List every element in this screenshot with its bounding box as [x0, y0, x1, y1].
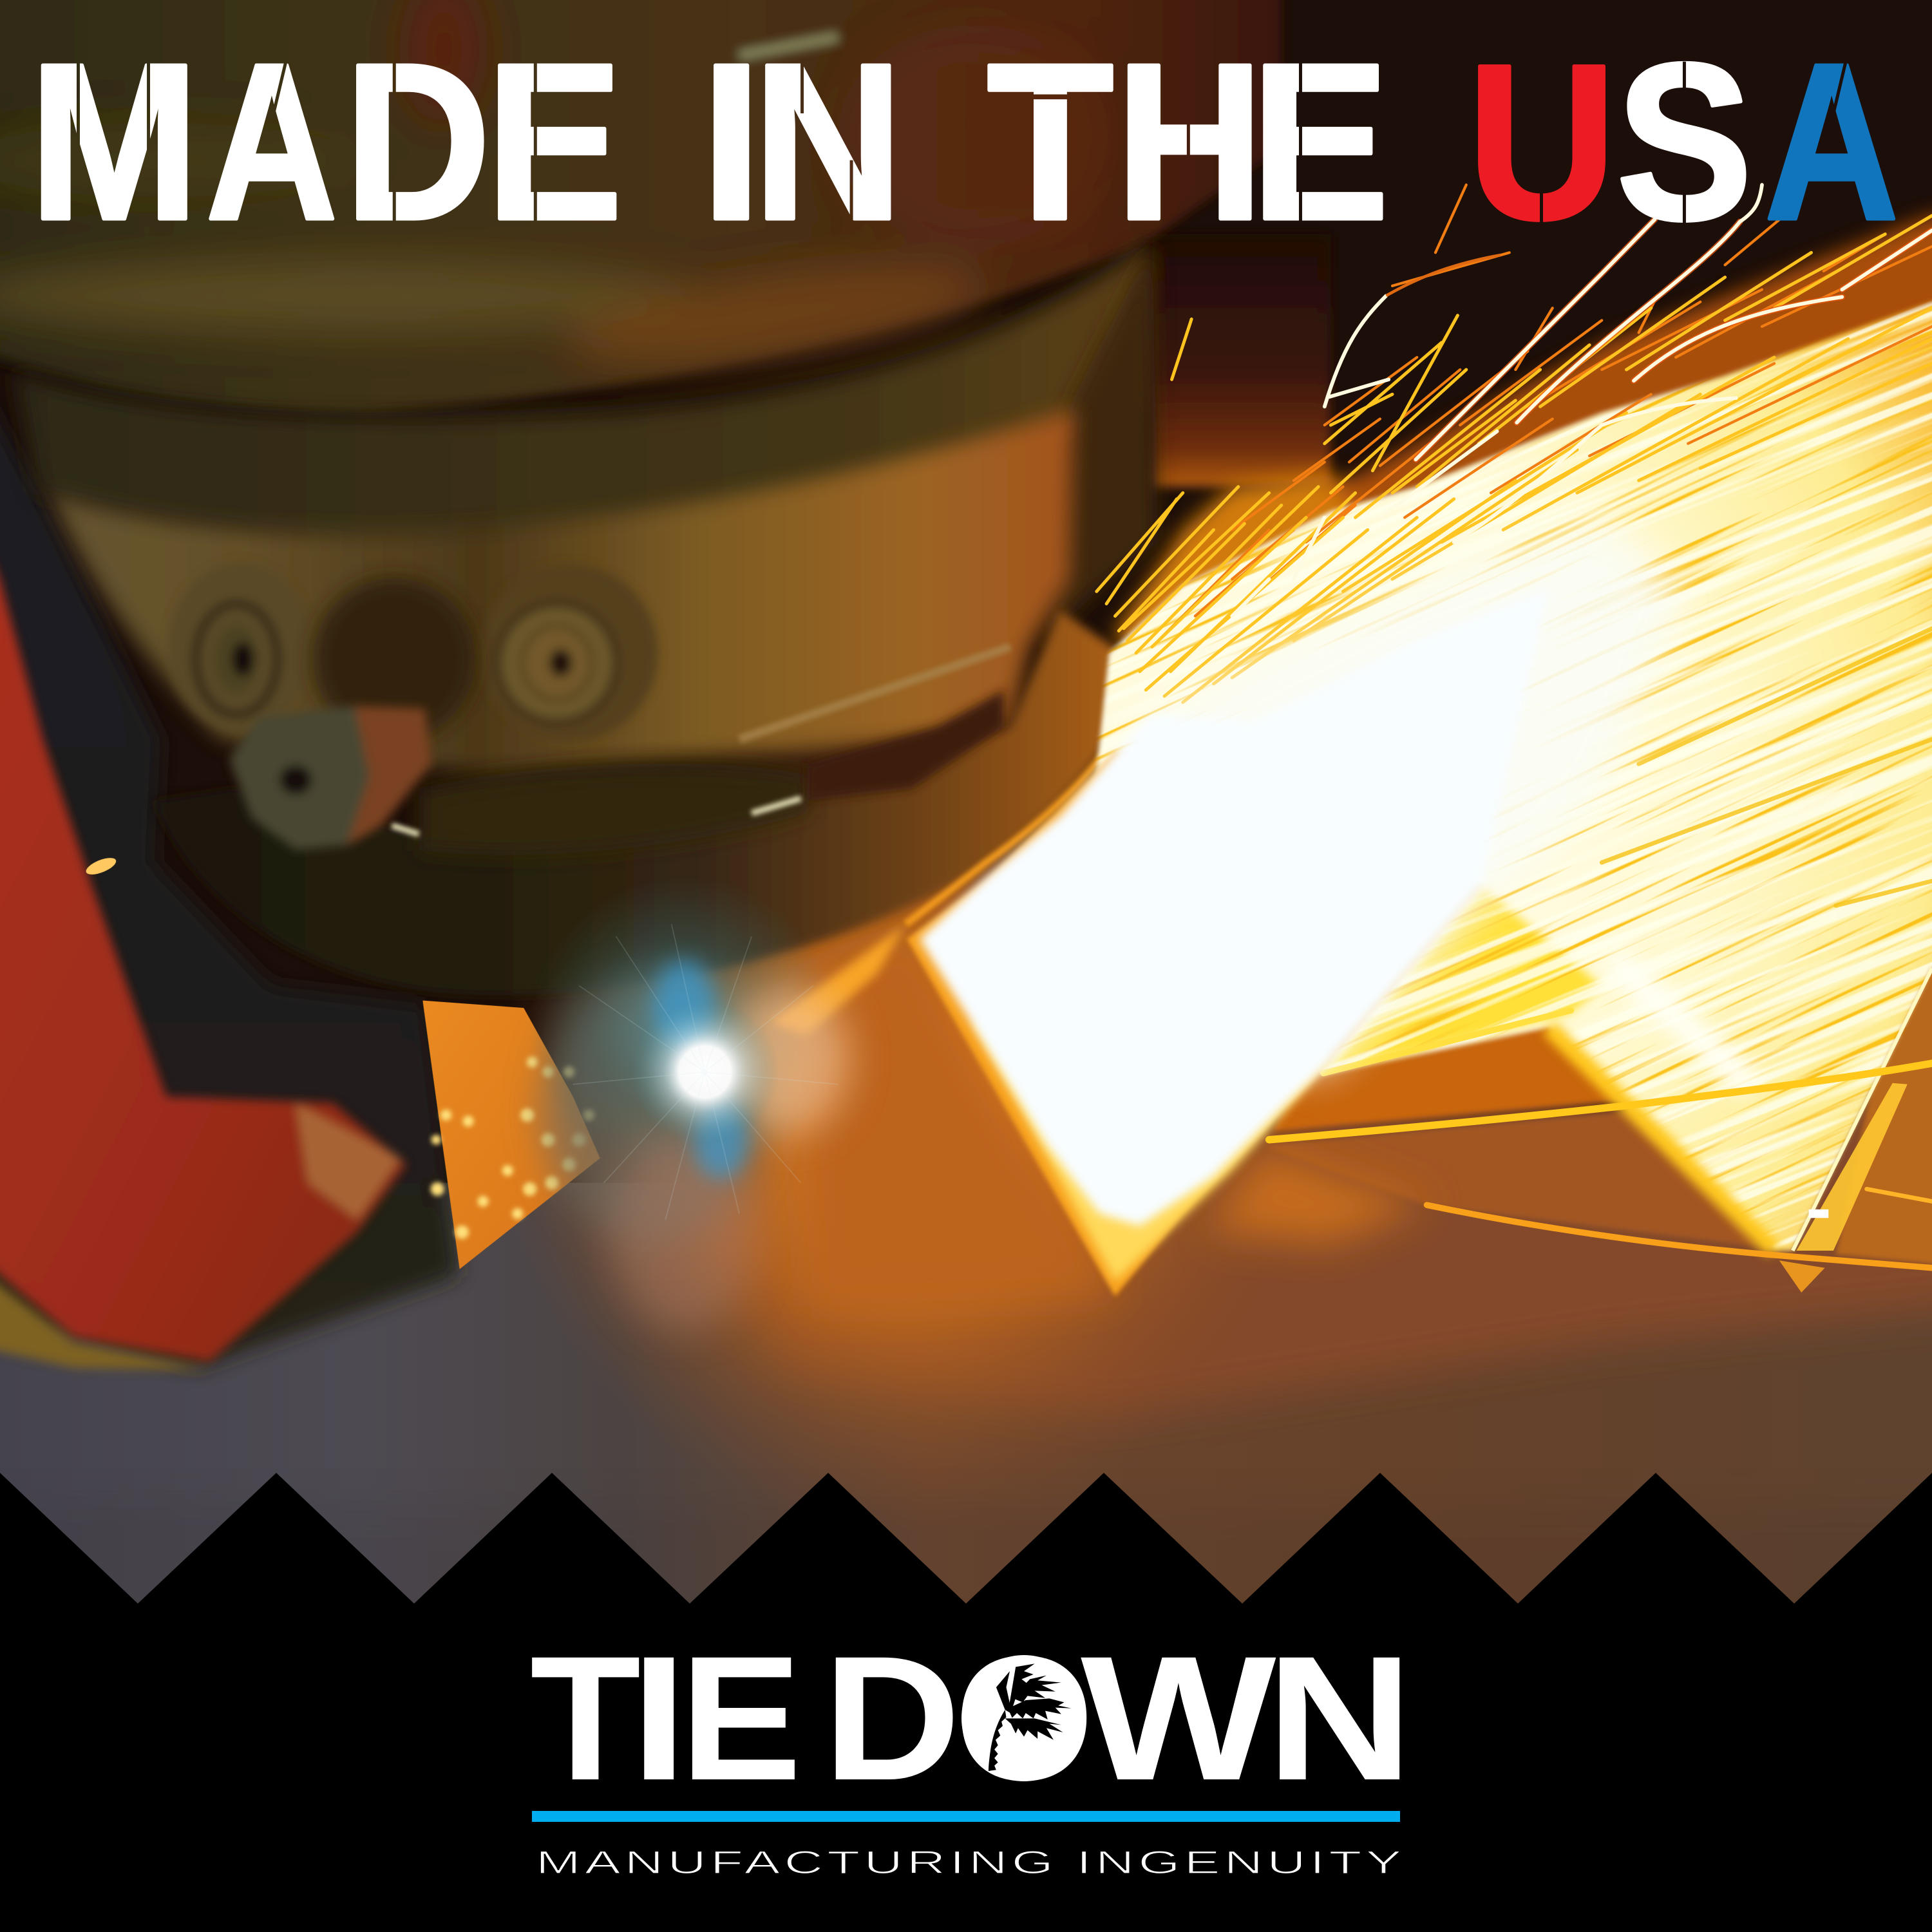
icon: hose fitting [229, 578, 476, 850]
title: MADE IN THE USA: U [1468, 19, 1616, 265]
title: MADE IN THE USA: A [1765, 17, 1899, 266]
gray haze around flare [542, 973, 764, 1244]
title: MADE IN THE USA: S [1616, 17, 1752, 267]
title: MADE IN THE USA: T [987, 17, 1113, 266]
soft white bloom around core [1140, 518, 1688, 1072]
orange wedge beside big tooth [788, 936, 1115, 1306]
spark glow edge [1325, 216, 1932, 567]
spark streaks: yellow [1097, 216, 1932, 703]
flare rays [573, 924, 838, 1220]
dark right-side housing [1041, 244, 1158, 647]
machine top cap [0, 0, 1282, 415]
warm glow under star [493, 690, 1331, 1528]
logo: TIE DOWN: D [823, 1619, 961, 1817]
orange edge of big tooth [907, 752, 1481, 1296]
logo O filled disc [961, 1655, 1086, 1781]
logo: TIE DOWN: O [954, 1619, 1094, 1817]
spark streaks: orange [1158, 185, 1932, 641]
logo: TIE DOWN: N [1266, 1619, 1413, 1817]
logo: TIE DOWN [530, 1619, 1413, 1817]
blue-teal flare haze [530, 875, 838, 1183]
black zigzag footer [0, 1473, 1932, 1932]
title: MADE IN THE USA: E [486, 17, 623, 266]
cap reflections [0, 0, 1109, 383]
title: MADE IN THE USA [41, 61, 1896, 223]
orange beams across notch [1269, 1010, 1932, 1268]
orange glow on steel plate [616, 1084, 1932, 1417]
logo: TIE DOWN: T [530, 1620, 641, 1817]
orange slot in steel [422, 1001, 600, 1269]
dark block left of sparks [1152, 234, 1331, 487]
bright rim by flare [770, 924, 905, 1035]
flare star [604, 971, 806, 1173]
stray arc [1386, 255, 1501, 296]
icon: right mounting bolt [480, 564, 658, 742]
orange streaks [1094, 326, 1932, 1234]
logo: TIE DOWN: I [630, 1619, 687, 1817]
warm halo right of star [727, 986, 850, 1133]
red arm [0, 493, 406, 1370]
icon: left mounting bolt [169, 563, 312, 731]
title: MADE IN THE USA: A [206, 17, 337, 267]
tan machine body [50, 409, 1074, 776]
dark plate shading at the foot [0, 1503, 1932, 1651]
right tooth of steel [1549, 959, 1932, 1293]
orange underlay left of sparks [1115, 475, 1380, 721]
yellow tip of big tooth [973, 936, 1331, 1282]
logo: TIE DOWN: E [680, 1620, 802, 1817]
hot rim of disk [905, 677, 1140, 924]
highlights on disk [392, 799, 801, 834]
sparkles in slot [432, 1058, 593, 1238]
title: MADE IN THE USA: I [701, 18, 762, 267]
grinding disk [154, 610, 1140, 995]
brown notch between teeth [1208, 936, 1932, 1269]
title: MADE IN THE USA: H [1115, 17, 1264, 266]
white streaks [1100, 300, 1932, 1249]
spark on arm [84, 855, 118, 878]
logo blue rule [532, 1811, 1400, 1822]
yellow spark field [1093, 299, 1932, 1253]
white-hot core [919, 589, 1549, 1226]
title: MADE IN THE USA: M [29, 17, 199, 267]
title: MADE IN THE USA: E [1251, 17, 1389, 266]
saturated base strip [1323, 886, 1602, 1074]
spark streaks: gold lower field [1602, 629, 1932, 905]
machine middle band [15, 244, 1148, 548]
tagline: MANUFACTURING INGENUITY: MANUFACTURING INGENUITY [536, 1844, 1401, 1880]
logo: TIE DOWN: W [1081, 1620, 1278, 1817]
pink reflection below star [610, 1133, 758, 1331]
title: MADE IN THE USA: D [345, 17, 491, 267]
spark streaks: orange halo of bright lines [1416, 220, 1932, 460]
spark streaks: bright white [1232, 185, 1932, 616]
steel plate surface [0, 1183, 1932, 1676]
left shadow wall [0, 333, 459, 1368]
icon: palm tree in logo O [989, 1663, 1072, 1771]
title: MADE IN THE USA: N [753, 17, 904, 266]
shadow under body [419, 647, 1010, 855]
blue flare spots [654, 960, 748, 1179]
